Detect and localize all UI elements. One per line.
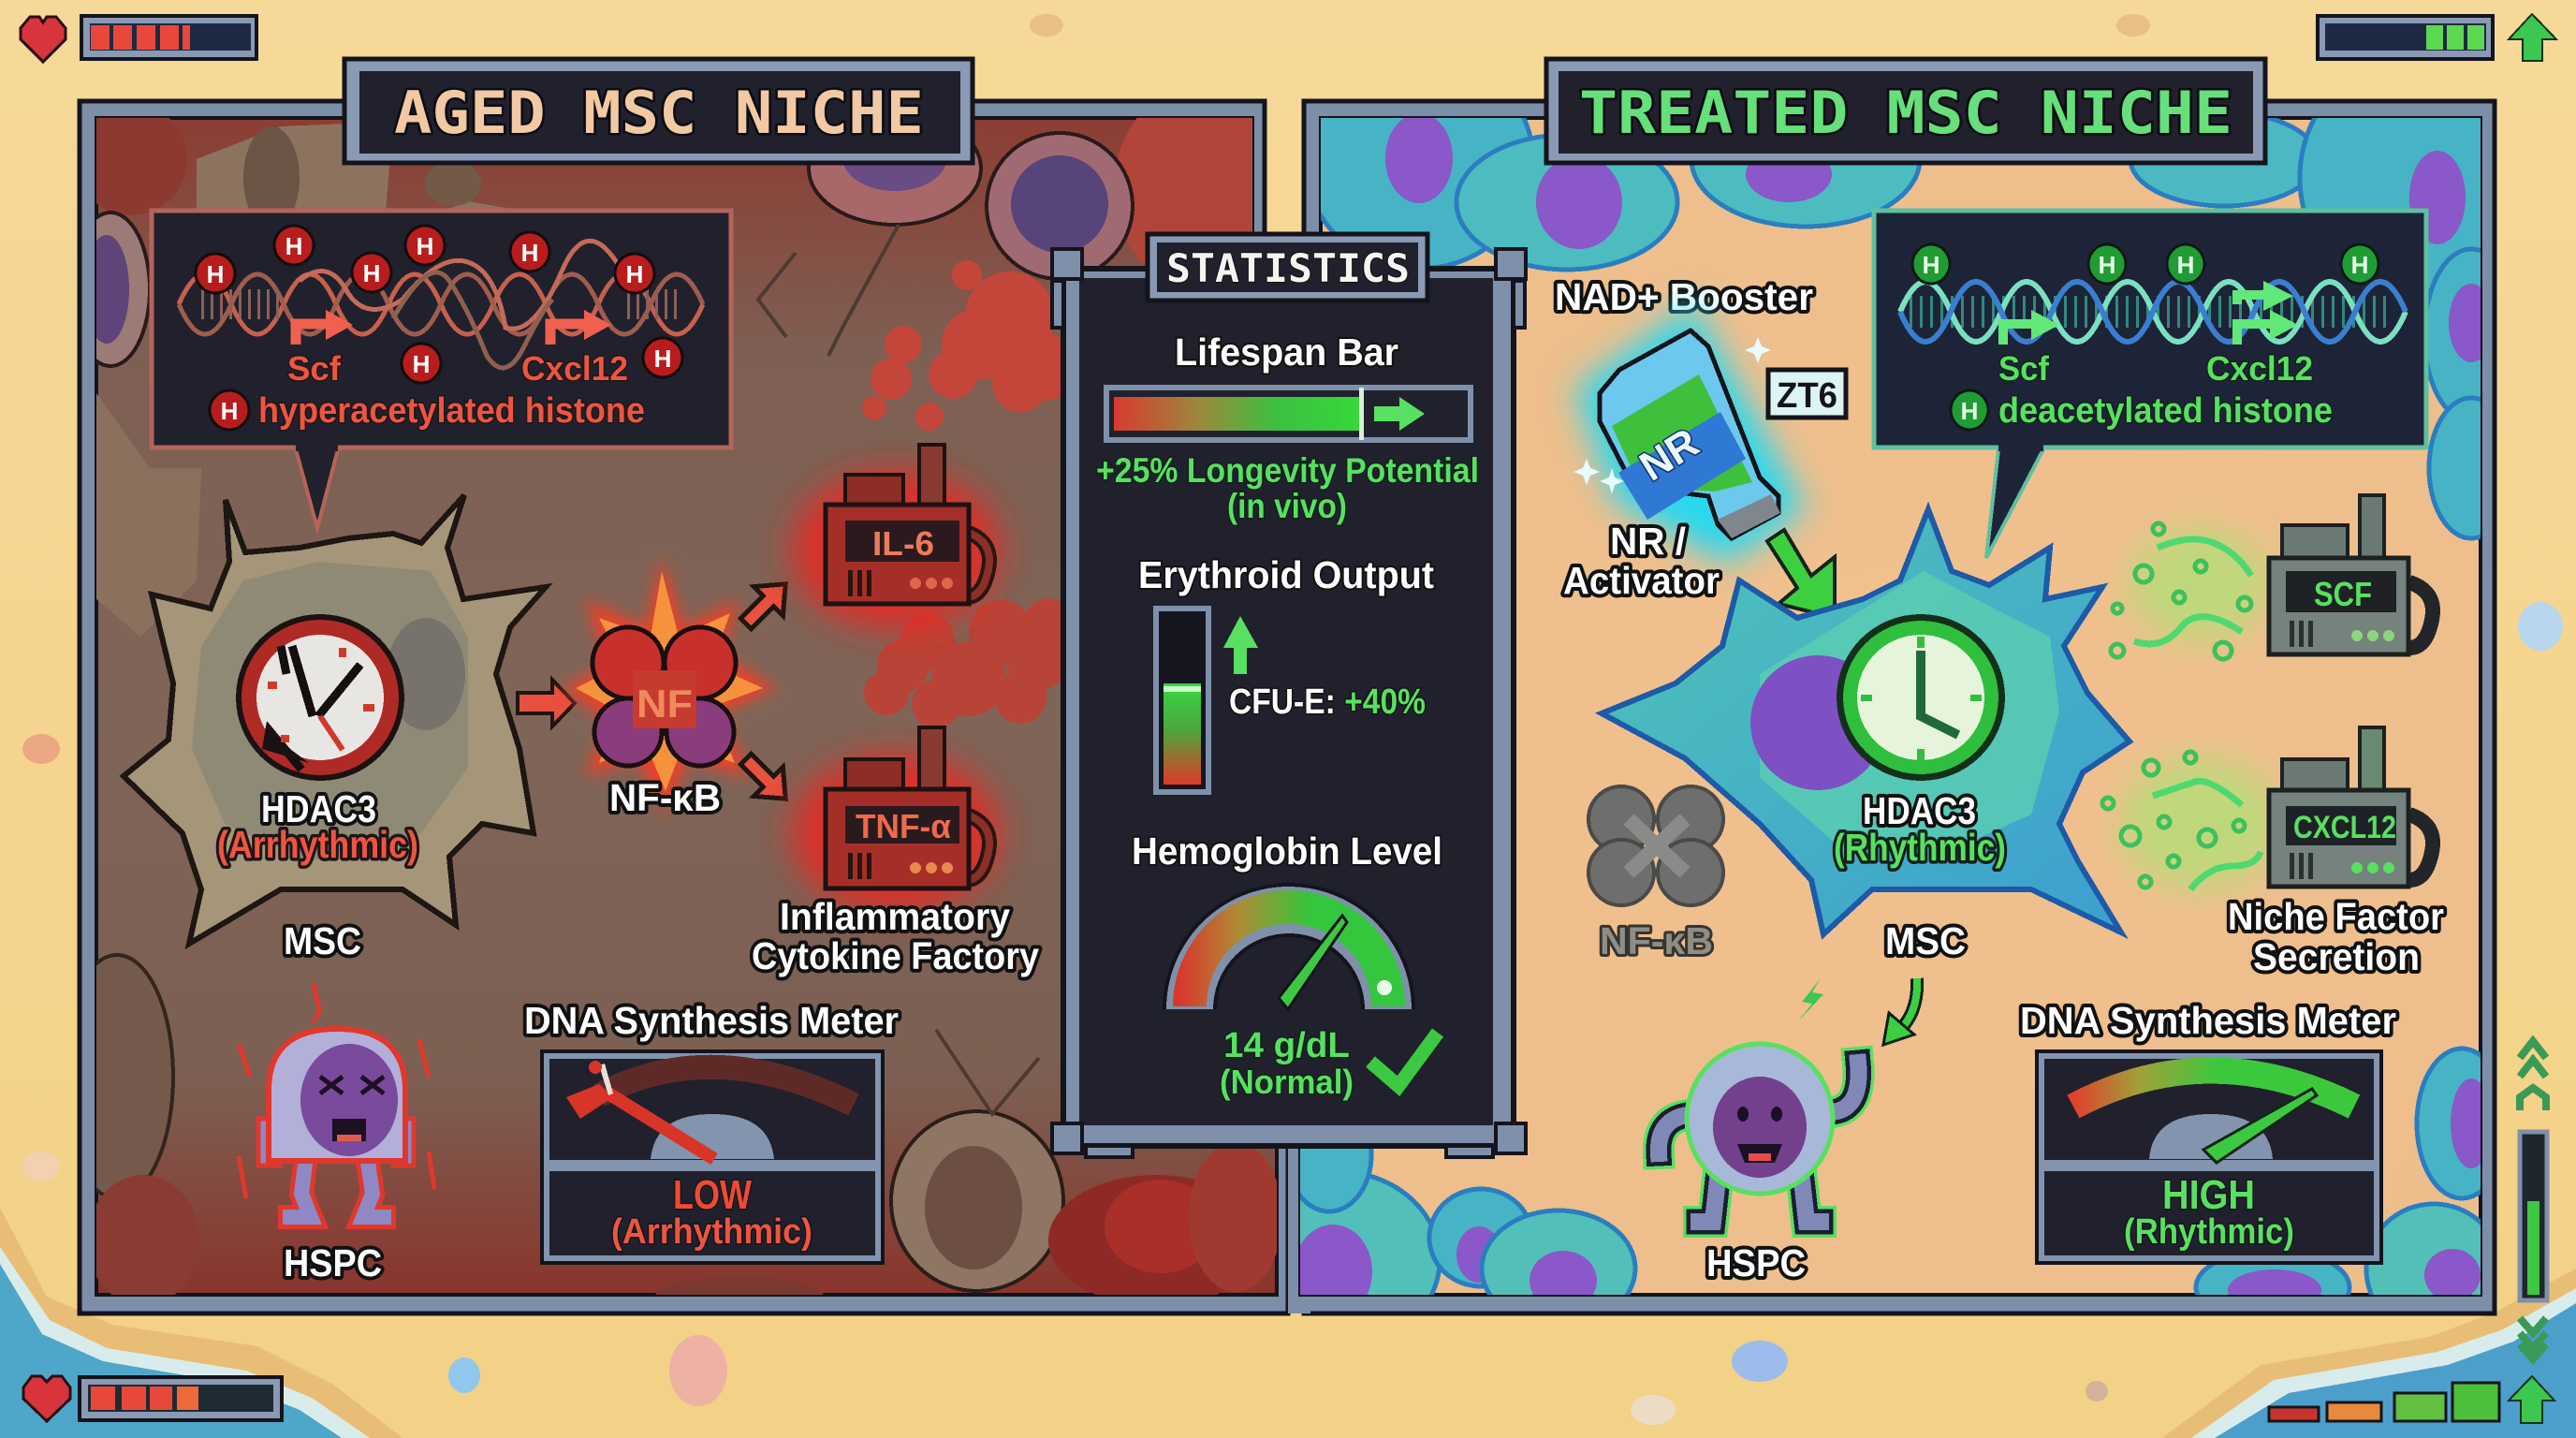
erythroid output tube [1138, 553, 1434, 792]
meter: high [2037, 1051, 2381, 1263]
HUD: top-right energy [2318, 14, 2556, 61]
label: niche factor secretion: Secretion [2253, 935, 2420, 978]
callout: deacetylated DNA: deacetylated histone [1998, 391, 2333, 431]
arrow: NF-kB to IL-6 [731, 569, 800, 638]
lifespan bar [1106, 330, 1471, 440]
Scf and Cxcl12 promoter arrows [2003, 295, 2270, 345]
DNA tangled strands [179, 241, 703, 368]
title: aged MSC niche [344, 59, 973, 163]
NR activator bottle: NR [1632, 419, 1706, 490]
label: DNA synthesis meter aged: DNA Synthesis Meter [524, 999, 899, 1042]
callout: hyperacetylated DNA: Scf [287, 349, 342, 388]
character: happy HSPC [1659, 1044, 1859, 1222]
label: MSC aged: MSC [284, 919, 361, 962]
label: HDAC3 arrhythmic: (Arrhythmic) [217, 823, 418, 866]
label: NAD+ booster: NAD+ Booster [1555, 275, 1813, 318]
label: NF-kB inactive: NF-κB [1600, 919, 1713, 962]
label: NF-kB aged: NF-κB [609, 776, 721, 819]
panel: statistics [1052, 234, 1526, 1157]
arrow: MSC to NF-kB [518, 680, 575, 726]
callout: deacetylated DNA [1874, 211, 2426, 558]
factory: IL-6 [791, 445, 1001, 630]
meter: high: (Rhythmic) [2124, 1212, 2294, 1252]
callout: deacetylated DNA: Cxcl12 [2206, 349, 2313, 388]
treated MSC cell [1602, 509, 2130, 934]
callout: hyperacetylated DNA: Cxcl12 [521, 349, 628, 388]
meter: low: (Arrhythmic) [611, 1212, 812, 1252]
label: HDAC3 rhythmic: (Rhythmic) [1834, 826, 2006, 869]
callout: deacetylated DNA: H [2099, 251, 2115, 279]
Scf and Cxcl12 promoter arrows [296, 324, 585, 345]
callout: hyperacetylated DNA: hyperacetylated histone [258, 391, 645, 431]
HUD: right side scale [2520, 1041, 2547, 1359]
NF-kB active complex: NF [637, 682, 693, 726]
ZT6 badge: ZT6 [1777, 376, 1837, 416]
NR activator bottle [1587, 318, 1793, 552]
sparkles [1573, 337, 1771, 494]
callout: hyperacetylated DNA: H [363, 259, 380, 287]
label: HSPC aged: HSPC [284, 1241, 382, 1284]
label: DNA synthesis meter treated: DNA Synthesis Meter [2020, 999, 2396, 1042]
smoke: IL-6 [862, 260, 1077, 431]
longevity text: +25% Longevity Potential [1096, 451, 1479, 490]
HUD: bottom-right signal [2269, 1376, 2554, 1423]
aged MSC cell [124, 495, 546, 944]
inactive NF-kB [1588, 786, 1723, 905]
H markers [196, 226, 682, 430]
HUD: top-left health [21, 16, 256, 62]
hemoglobin gauge [1132, 829, 1442, 1101]
arrow: MSC to HSPC [1883, 978, 1917, 1045]
callout: deacetylated DNA: H [2351, 251, 2368, 279]
arrow: activator to MSC [1767, 530, 1835, 618]
hemoglobin gauge: (Normal) [1220, 1063, 1354, 1101]
ZT6 badge [1768, 370, 1846, 418]
smoke: TNF [864, 598, 1073, 728]
lifespan bar: Lifespan Bar [1175, 330, 1398, 374]
factory: TNF-alpha [791, 727, 1001, 913]
arrow: NF-kB to TNF [731, 744, 800, 814]
label: HDAC3 arrhythmic: HDAC3 [261, 787, 376, 830]
icon: lightning [1797, 978, 1823, 1022]
callout: hyperacetylated DNA: H [417, 232, 433, 260]
longevity text [1096, 451, 1479, 525]
callout: hyperacetylated DNA: H [626, 260, 643, 288]
erythroid output tube: Erythroid Output [1138, 553, 1434, 596]
factory: CXCL12: CXCL12 [2293, 810, 2396, 845]
statistics header: STATISTICS [1166, 245, 1410, 291]
label: NR activator: Activator [1563, 559, 1720, 602]
aged background cells [61, 84, 1292, 1317]
meter: high: HIGH [2162, 1172, 2255, 1218]
label: NR activator: NR / [1610, 520, 1686, 563]
callout: hyperacetylated DNA [152, 211, 731, 528]
hemoglobin gauge: Hemoglobin Level [1132, 829, 1442, 873]
factory: IL-6: IL-6 [872, 524, 934, 563]
callout: hyperacetylated DNA: H [521, 239, 538, 267]
label: HDAC3 rhythmic [1834, 789, 2006, 869]
character: stressed HSPC [239, 983, 434, 1217]
label: niche factor secretion [2228, 895, 2444, 978]
factory: CXCL12 [2269, 727, 2433, 887]
callout: hyperacetylated DNA: H [221, 397, 238, 425]
title: treated MSC niche [1546, 59, 2265, 163]
callout: hyperacetylated DNA: H [285, 232, 302, 260]
callout: deacetylated DNA: H [1923, 251, 1939, 279]
title: treated MSC niche: TREATED MSC NICHE [1579, 79, 2232, 147]
meter: low [542, 1051, 883, 1263]
rhythmic clock [1837, 614, 2005, 781]
treated background cells [1300, 118, 2481, 1295]
H markers [1912, 244, 2378, 430]
panel: aged MSC niche [61, 84, 1292, 1317]
label: HSPC treated: HSPC [1706, 1241, 1806, 1284]
label: niche factor secretion: Niche Factor [2228, 895, 2444, 938]
label: HDAC3 rhythmic: HDAC3 [1863, 789, 1976, 832]
longevity text: (in vivo) [1227, 487, 1347, 525]
statistics header [1148, 234, 1427, 301]
NF-kB active complex [562, 557, 777, 814]
meter: low: LOW [673, 1172, 752, 1218]
label: NR activator [1563, 520, 1720, 602]
panel: treated MSC niche [1288, 99, 2497, 1316]
secretion particles: SCF [2111, 523, 2270, 659]
label: HDAC3 arrhythmic [217, 787, 418, 866]
corner ornaments [1052, 249, 1526, 1157]
factory: SCF: SCF [2314, 575, 2372, 613]
erythroid output tube: CFU-E: +40% [1229, 682, 1426, 722]
secretion particles: CXCL12 [2102, 752, 2279, 889]
hemoglobin gauge: 14 g/dL [1223, 1026, 1350, 1065]
DNA clean helix [1900, 282, 2406, 342]
arrhythmic clock [236, 614, 404, 781]
label: inflammatory cytokine factory: Cytokine Factory [752, 934, 1039, 977]
label: inflammatory cytokine factory [752, 895, 1039, 977]
callout: deacetylated DNA: Scf [1998, 349, 2050, 388]
callout: hyperacetylated DNA: H [413, 350, 430, 378]
callout: hyperacetylated DNA: H [654, 345, 671, 373]
label: MSC treated: MSC [1885, 919, 1966, 962]
factory: SCF [2269, 495, 2433, 654]
title: aged MSC niche: AGED MSC NICHE [394, 79, 924, 147]
HUD: bottom-left health [23, 1376, 282, 1421]
label: inflammatory cytokine factory: Inflammatory [780, 895, 1010, 938]
factory: TNF-alpha: TNF-α [856, 807, 951, 845]
callout: hyperacetylated DNA: H [207, 260, 224, 288]
callout: deacetylated DNA: H [1961, 397, 1978, 425]
callout: deacetylated DNA: H [2177, 251, 2194, 279]
